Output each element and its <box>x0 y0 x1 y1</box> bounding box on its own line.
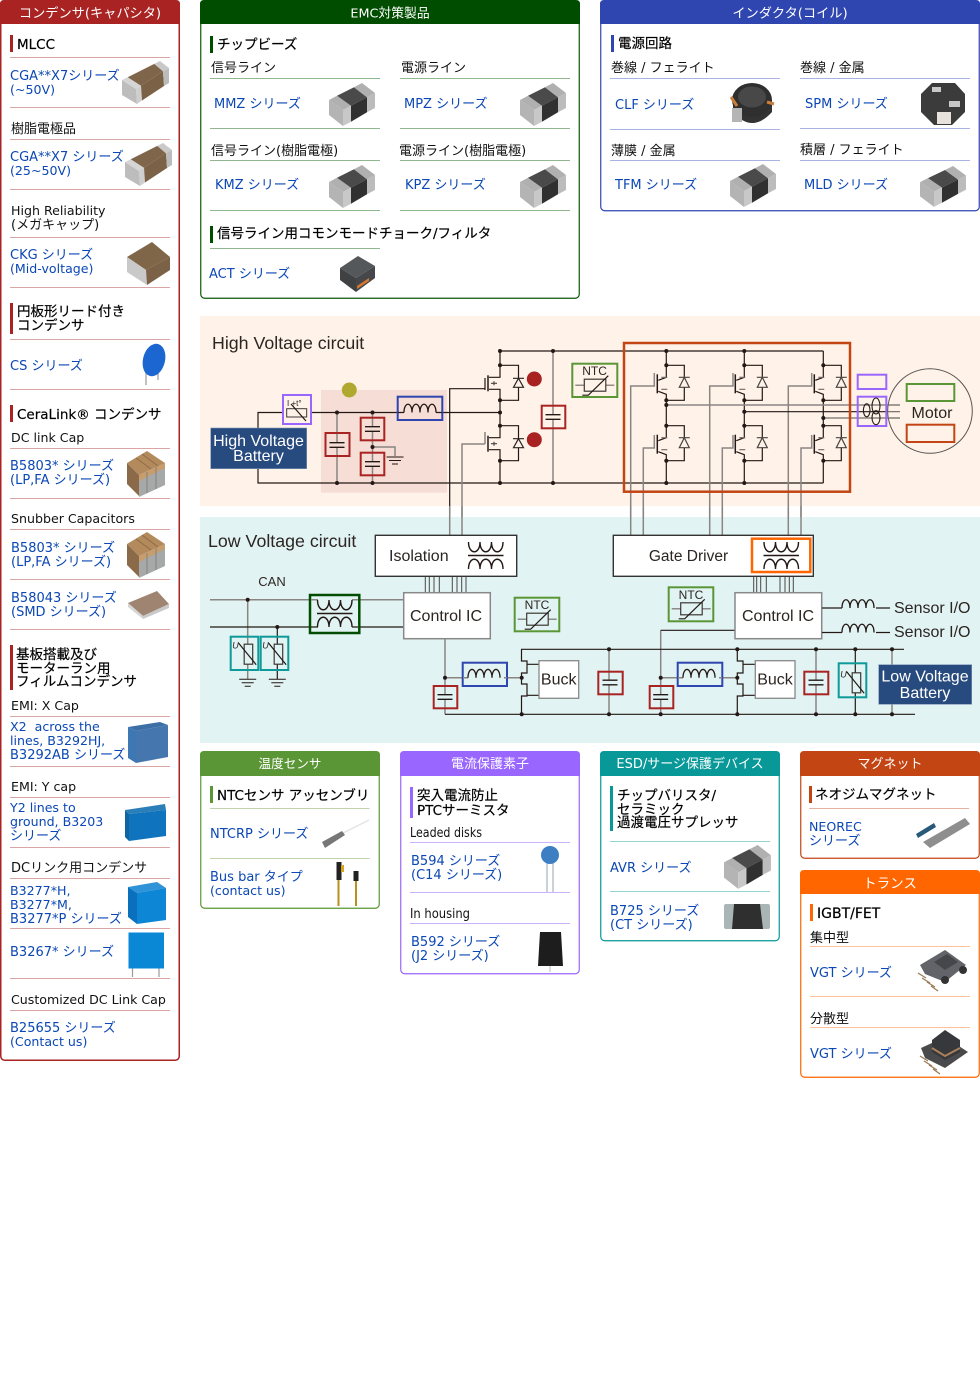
heading: CeraLink: CeraLink® コンデンサ <box>17 406 162 423</box>
subheading: EMI Y: EMI: Y cap <box>11 779 76 794</box>
item: B592: (J2 シリーズ) <box>411 948 489 964</box>
component: capacitor right <box>650 686 673 708</box>
label: CAN: CAN <box>258 574 286 589</box>
subheading: wound metal: 巻線 / 金属 <box>800 60 865 76</box>
battery: low voltage <box>879 665 972 704</box>
header: magnets <box>800 751 980 776</box>
subheading: multilayer ferrite: 積層 / フェライト <box>800 143 904 158</box>
subheading: distributed: 分散型 <box>810 1012 849 1027</box>
header: EMC <box>200 0 580 24</box>
item: Y2 <box>9 800 166 844</box>
item: CKG: (Mid-voltage) <box>10 261 93 276</box>
block: buck right <box>755 661 795 698</box>
item: MMZ: MMZ シリーズ <box>214 96 301 112</box>
item: B5803: B5803* シリーズ <box>10 458 114 474</box>
item: MPZ: MPZ シリーズ <box>404 96 487 112</box>
item: Y2: Y2 lines to <box>9 800 76 815</box>
component: capacitor left <box>434 686 457 708</box>
item: B25655: (Contact us) <box>10 1034 87 1049</box>
heading: film capacitors: 基板搭載及び <box>16 646 97 663</box>
sensor input 1: Sensor I/O <box>894 600 970 617</box>
item: NEOREC: シリーズ <box>809 833 860 849</box>
item: B58043: B58043 シリーズ <box>11 590 117 606</box>
heading: inrush PTC: PTCサーミスタ <box>417 803 510 819</box>
panel: capacitors <box>0 0 180 1060</box>
block: control IC right: Control IC <box>742 608 814 625</box>
item: CGA X7: (~50V) <box>10 82 55 97</box>
subheading: concentrated: 集中型 <box>810 930 849 946</box>
item: MLD <box>804 166 966 207</box>
battery: high voltage <box>211 428 307 469</box>
component: PTC thermistor <box>283 395 311 424</box>
subheading: power line resin: 電源ライン(樹脂電極) <box>399 144 526 159</box>
item: B3277: B3277*H, <box>10 883 70 898</box>
item: X2: B3292AB シリーズ <box>10 747 125 763</box>
subheading: customized: Customized DC Link Cap <box>11 992 166 1007</box>
component: DC link capacitor <box>542 406 565 428</box>
panel: inductors <box>600 0 980 211</box>
header: ESD surge <box>600 751 780 776</box>
item: B725: B725 シリーズ <box>610 903 699 919</box>
heading: high voltage circuit: High Voltage circuit <box>212 333 364 353</box>
component: PTC thermistor: I +t° <box>287 399 302 408</box>
item: B3277 <box>10 882 166 927</box>
item: B592: B592 シリーズ <box>411 934 500 950</box>
panel: temperature sensors <box>200 751 380 908</box>
item: B3277: B3277*M, <box>10 897 72 912</box>
item: B3277: B3277*P シリーズ <box>10 911 122 927</box>
sensor input 2 <box>822 624 970 641</box>
item: VGT concentrated: VGT シリーズ <box>810 965 892 981</box>
item: AVR <box>610 845 771 889</box>
header: transformers <box>800 870 980 894</box>
panel: magnets <box>800 751 980 858</box>
heading: film capacitors: モーターラン用 <box>16 661 110 677</box>
component: inductor left <box>463 663 507 686</box>
block: gate driver: Gate Driver <box>649 548 728 565</box>
component: NTC <box>572 364 617 397</box>
item: B25655: B25655 シリーズ <box>10 1020 116 1036</box>
subheading: wound ferrite: 巻線 / フェライト <box>611 60 715 76</box>
header: inductors: インダクタ(コイル) <box>732 6 848 22</box>
subheading: DC link cap: DC link Cap <box>11 430 84 445</box>
item: X2: lines, B3292HJ, <box>10 733 105 748</box>
item: SPM: SPM シリーズ <box>805 96 888 112</box>
item: B5803 snubber: (LP,FA シリーズ) <box>11 554 111 570</box>
subheading: thin film metal: 薄膜 / 金属 <box>611 144 676 159</box>
subheading: snubber: Snubber Capacitors <box>11 511 135 526</box>
item: B3267 <box>10 932 164 977</box>
sensor input 1 <box>822 600 970 617</box>
item: X2: X2 across the <box>10 719 100 734</box>
heading: inrush PTC: 突入電流防止 <box>417 788 498 804</box>
panel: ESD surge <box>600 751 780 941</box>
component: half bridge <box>488 363 542 463</box>
item: B3267: B3267* シリーズ <box>10 944 114 960</box>
component: common mode choke <box>310 595 359 633</box>
heading: NTC assembly: NTCセンサ アッセンブリ <box>217 787 369 804</box>
header: capacitors <box>0 0 180 24</box>
header: EMC: EMC対策製品 <box>350 6 430 22</box>
component: varistor left <box>231 637 258 670</box>
heading: low voltage circuit: Low Voltage circuit <box>208 531 356 551</box>
subheading: signal line: 信号ライン <box>211 60 276 76</box>
item: KPZ <box>405 165 566 208</box>
component: Y capacitor top <box>361 418 384 440</box>
motor: Motor <box>912 405 953 422</box>
item: B58043: (SMD シリーズ) <box>11 604 106 620</box>
marker: olive dot <box>342 382 357 398</box>
heading: common mode choke: 信号ライン用コモンモードチョーク/フィルタ <box>217 226 491 242</box>
block: control IC left: Control IC <box>410 608 482 625</box>
subheading: high reliability: High Reliability <box>11 203 106 218</box>
item: NTCRP: NTCRP シリーズ <box>210 826 308 842</box>
component: capacitor middle <box>598 672 623 694</box>
panel: EMC <box>200 0 580 298</box>
block: buck left <box>539 661 579 698</box>
item: B5803 snubber <box>11 532 165 578</box>
block: buck left: Buck <box>541 672 577 688</box>
item: CKG: CKG シリーズ <box>10 247 93 263</box>
item: B594 <box>411 846 559 892</box>
heading: MLCC: MLCC <box>17 37 55 53</box>
item: ACT <box>209 256 375 292</box>
item: CLF <box>615 83 774 123</box>
battery: high voltage: Battery <box>233 448 284 465</box>
item: TFM: TFM シリーズ <box>614 177 697 193</box>
component: varistor right <box>261 637 288 670</box>
heading: film capacitors: フィルムコンデンサ <box>16 673 137 690</box>
heading: power circuit: 電源回路 <box>618 36 672 52</box>
heading: disc leaded: 円板形リード付き <box>17 304 125 320</box>
item: KMZ <box>215 165 375 208</box>
component: inverter switches <box>624 343 850 492</box>
panel: low voltage circuit <box>200 506 980 743</box>
item: CGA X7 <box>10 61 169 104</box>
block: buck right: Buck <box>757 672 794 688</box>
item: Y2: ground, B3203 <box>10 814 103 829</box>
subheading: EMI X: EMI: X Cap <box>11 698 79 713</box>
heading: varistors: セラミック <box>617 802 684 818</box>
block: control IC right <box>735 593 822 639</box>
subheading: DC link: DCリンク用コンデンサ <box>11 860 147 876</box>
component: Y capacitor bottom <box>361 453 384 475</box>
item: KPZ: KPZ シリーズ <box>405 177 486 193</box>
wiring: low voltage <box>210 506 915 716</box>
block: isolation <box>375 535 517 576</box>
block: control IC left <box>404 593 490 639</box>
item: SPM <box>805 83 965 125</box>
header: capacitors: コンデンサ(キャパシタ) <box>19 4 161 22</box>
item: MPZ <box>404 83 566 126</box>
item: CLF: CLF シリーズ <box>615 97 694 113</box>
panel: high voltage circuit <box>200 316 980 535</box>
item: B725: (CT シリーズ) <box>610 917 693 933</box>
item: bus bar: (contact us) <box>210 883 286 898</box>
subheading: leaded disks: Leaded disks <box>410 826 482 841</box>
item: X2 <box>10 719 168 763</box>
header: temperature sensors: 温度センサ <box>259 756 321 771</box>
battery: low voltage: Low Voltage <box>881 668 969 686</box>
item: B5803 <box>10 451 165 497</box>
item: MLD: MLD シリーズ <box>804 177 888 193</box>
item: TFM <box>614 164 776 207</box>
item: CGA X7 resin: (25~50V) <box>10 163 71 178</box>
item: KMZ: KMZ シリーズ <box>215 177 299 193</box>
item: B5803: (LP,FA シリーズ) <box>10 472 110 488</box>
block: isolation: Isolation <box>389 548 449 565</box>
heading: IGBT FET: IGBT/FET <box>817 906 881 922</box>
heading: varistors: チップバリスタ/ <box>617 788 716 804</box>
header: temperature sensors <box>200 751 380 776</box>
item: CGA X7 resin <box>10 143 172 186</box>
item: B594: B594 シリーズ <box>411 853 500 869</box>
component: NTC left <box>515 598 559 631</box>
item: B594: (C14 シリーズ) <box>411 867 502 883</box>
item: ACT: ACT シリーズ <box>209 266 290 282</box>
heading: varistors <box>610 786 738 831</box>
heading: disc leaded <box>10 303 125 334</box>
item: Y2: シリーズ <box>10 828 61 844</box>
header: magnets: マグネット <box>857 757 923 772</box>
heading: film capacitors <box>10 645 137 690</box>
battery: high voltage: High Voltage <box>213 433 304 450</box>
component: inductor right <box>678 663 722 686</box>
panel: current protection <box>400 751 580 974</box>
item: NEOREC <box>809 818 970 849</box>
item: NTCRP <box>210 820 369 848</box>
item: B592 <box>411 932 563 972</box>
block: gate driver <box>613 535 813 576</box>
component: X capacitor <box>326 433 350 456</box>
item: CS: CS シリーズ <box>10 358 83 374</box>
item: B5803 snubber: B5803* シリーズ <box>11 540 115 556</box>
heading: disc leaded: コンデンサ <box>17 317 84 334</box>
item: CS <box>10 341 169 385</box>
item: AVR: AVR シリーズ <box>610 860 691 876</box>
heading: inrush PTC <box>410 787 510 819</box>
component: capacitor far right <box>804 672 828 694</box>
subheading: power line: 電源ライン <box>401 61 466 76</box>
item: VGT concentrated <box>810 950 967 991</box>
item: bus bar <box>210 862 358 906</box>
filter shaded area <box>321 390 447 493</box>
header: current protection: 電流保護素子 <box>451 757 529 772</box>
battery: low voltage: Battery <box>900 685 950 702</box>
subheading: in housing: In housing <box>410 907 470 922</box>
heading: neodymium magnet: ネオジムマグネット <box>815 787 936 803</box>
header: current protection <box>400 751 580 776</box>
item: bus bar: Bus bar タイプ <box>210 870 303 885</box>
subheading: high reliability: (メガキャップ) <box>11 218 99 233</box>
heading: varistors: 過渡電圧サプレッサ <box>617 815 738 831</box>
component: power inductor <box>398 397 442 420</box>
heading: chip beads: チップビーズ <box>217 37 297 53</box>
item: VGT distributed: VGT シリーズ <box>810 1046 892 1062</box>
panel: transformers <box>800 870 980 1077</box>
motor <box>888 369 972 453</box>
header: transformers: トランス <box>863 876 917 892</box>
header: inductors <box>600 0 980 24</box>
header: ESD surge: ESD/サージ保護デバイス <box>616 756 764 772</box>
item: B58043 <box>11 590 169 620</box>
item: CGA X7 resin: CGA**X7 シリーズ <box>10 149 124 165</box>
item: CGA X7: CGA**X7シリーズ <box>10 68 120 84</box>
subheading: signal line resin: 信号ライン(樹脂電極) <box>211 143 338 159</box>
item: VGT distributed <box>810 1030 968 1074</box>
item: CKG <box>10 242 170 285</box>
component: varistor battery side <box>839 663 866 697</box>
item: B725 <box>610 903 770 933</box>
item: NEOREC: NEOREC <box>809 819 862 834</box>
sensor input 2: Sensor I/O <box>894 624 970 641</box>
component: NTC right <box>669 587 713 621</box>
component: current sensor markers <box>858 375 886 426</box>
item: B25655 <box>10 1020 116 1049</box>
subheading: resin electrode: 樹脂電極品 <box>11 122 76 137</box>
wiring: high voltage bus <box>258 349 900 535</box>
item: MMZ <box>214 83 375 126</box>
